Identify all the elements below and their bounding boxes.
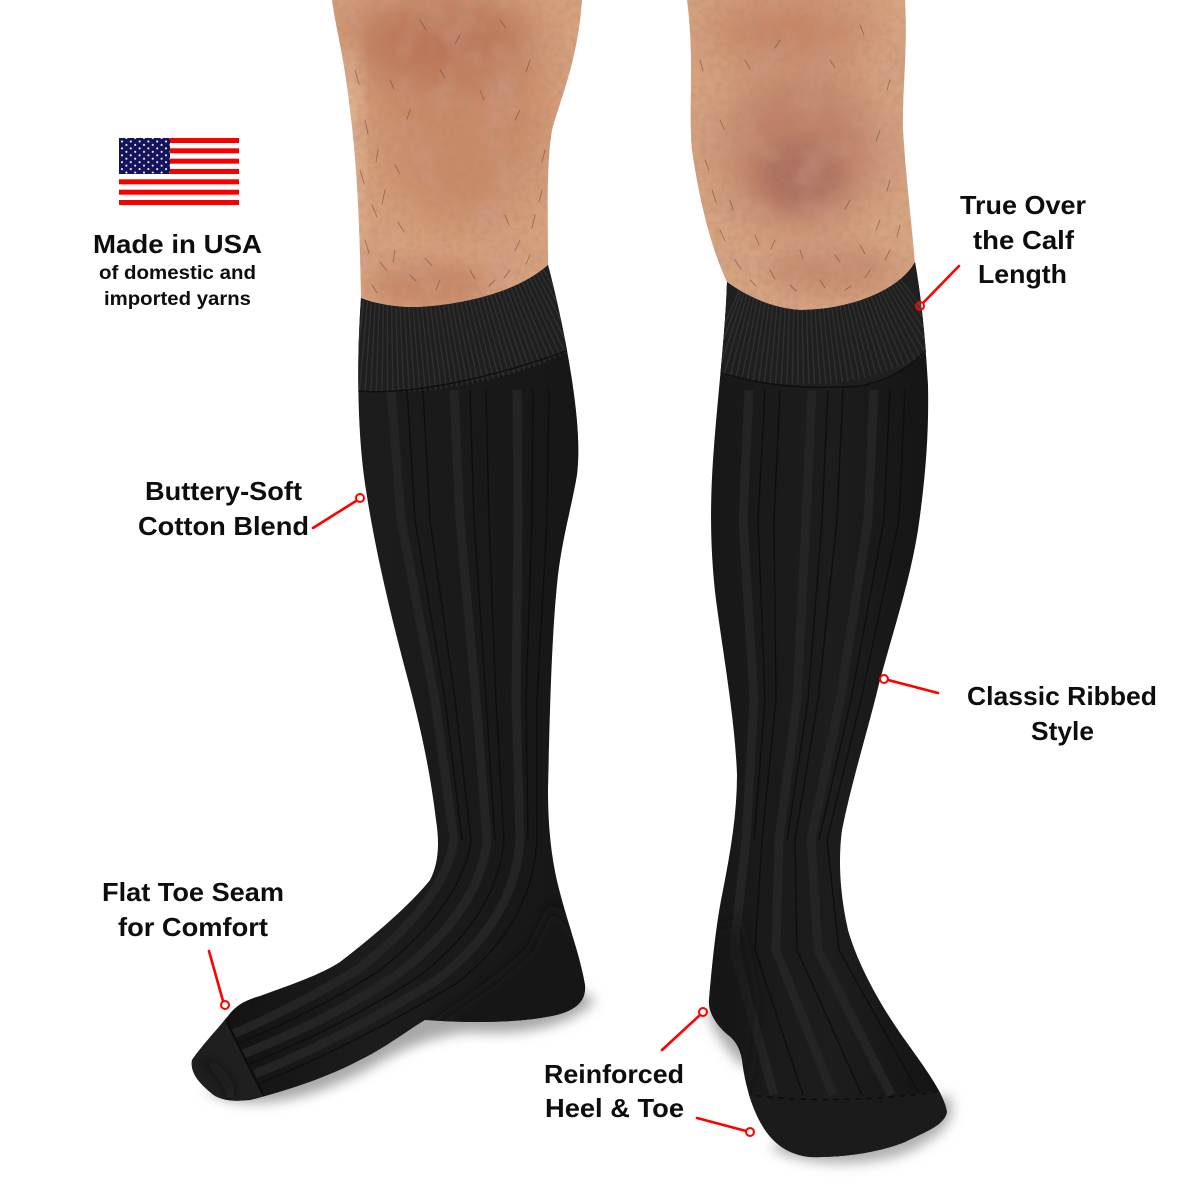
right sock: ribs [734,390,920,1095]
label: Classic Ribbed Style: Classic Ribbed [967,681,1157,711]
text: Made in USA: imported yarns [104,289,251,310]
label: Reinforced Heel & Toe [544,1059,684,1123]
left sock: heel reinforcement [429,910,586,1022]
callout arrow: toe [697,1118,754,1136]
label: Flat Toe Seam for Comfort: for Comfort [118,912,268,942]
text: Made in USA: of domestic and [99,263,256,284]
label: Reinforced Heel & Toe: Heel & Toe [545,1093,684,1123]
label: True Over the Calf Length [960,190,1086,289]
left sock: ribs [231,390,549,1083]
right sock: heel shadow [708,926,752,1082]
foot shadows [205,985,952,1164]
label: Classic Ribbed Style: Style [1031,716,1094,746]
label: Buttery-Soft Cotton Blend [138,476,309,541]
label: Flat Toe Seam for Comfort: Flat Toe Seam [102,877,284,907]
right sock: cuff band [720,263,926,372]
left sock: cuff band [355,262,582,392]
label: True Over the Calf Length: True Over [960,190,1086,220]
flag: USA [119,138,239,205]
right leg: skin [680,0,920,320]
left sock [180,250,600,1110]
right sock: toe cap [749,1090,947,1158]
text: Made in USA: Made in USA [93,229,262,259]
right sock [708,262,947,1158]
callout arrow: heel [662,1008,707,1050]
callout arrow: cotton blend [313,494,364,528]
label: Buttery-Soft Cotton Blend: Buttery-Soft [145,476,302,506]
label: Reinforced Heel & Toe: Reinforced [544,1059,684,1089]
label: Classic Ribbed Style [967,681,1157,746]
text: Made in USA [93,229,262,310]
callout arrow: ribbed style [880,675,938,693]
left sock: toe cap [192,1019,262,1101]
label: True Over the Calf Length: Length [978,259,1067,289]
label: True Over the Calf Length: the Calf [973,225,1074,255]
callout arrow: toe seam [209,951,229,1009]
left leg: skin [332,0,582,307]
label: Buttery-Soft Cotton Blend: Cotton Blend [138,511,309,541]
label: Flat Toe Seam for Comfort [102,877,284,942]
callout arrow: calf length [916,266,959,310]
